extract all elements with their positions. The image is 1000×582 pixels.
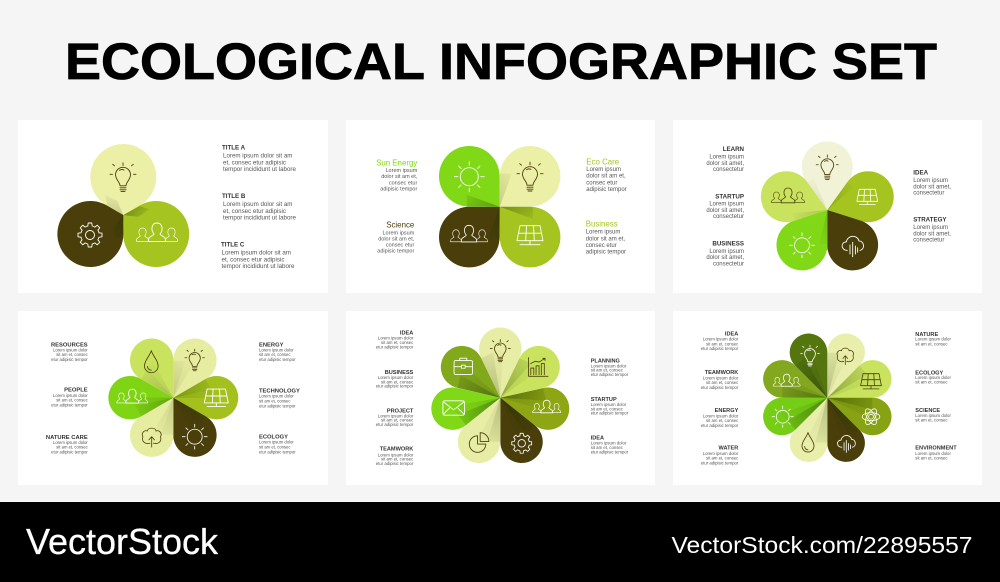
logo: VectorStock: VectorStock — [26, 521, 219, 562]
text: business: BUSINESS — [712, 241, 744, 248]
petal: drop — [784, 391, 845, 468]
icon: people — [450, 225, 488, 242]
text: idea: Lorem ipsum dolor — [591, 441, 627, 446]
text: environment: ENVIRONMENT — [915, 446, 957, 452]
text: title C: Lorem ipsum dolor sit am — [222, 250, 291, 257]
text: energy: ENERGY — [259, 342, 284, 348]
icon: people — [533, 400, 561, 413]
text: title B: TITLE B — [222, 193, 246, 200]
text: title A: tempor incididunt ut labore — [223, 166, 296, 173]
text: ecology: sit am et, consec — [915, 380, 948, 385]
text: strategy: dolor sit amet, — [913, 231, 951, 237]
panel: six petals — [18, 311, 328, 485]
icon: cloud — [837, 435, 855, 452]
petal: people — [108, 376, 173, 419]
text: title C: TITLE C — [221, 242, 245, 249]
text: business: etur adipisic tempor — [376, 384, 414, 389]
text: business: Lorem ipsum — [586, 230, 620, 236]
petal: people — [757, 354, 834, 415]
text: nature: Lorem ipsum dolor — [915, 337, 951, 342]
petal: drop — [122, 331, 192, 409]
text: ecology: ECOLOGY — [259, 434, 288, 440]
petal: bulb — [155, 331, 225, 409]
icon: solar panel — [857, 189, 878, 204]
petal: bulb — [479, 328, 522, 398]
text: idea: IDEA — [400, 330, 413, 336]
icon: cloud — [842, 236, 864, 257]
text: idea: dolor sit amet, — [913, 184, 951, 190]
text: sun energy: adipisic tempor — [380, 187, 417, 193]
petal: team — [107, 186, 201, 279]
text: idea: consectetur — [913, 191, 944, 197]
text: idea: Lorem ipsum dolor — [378, 336, 414, 341]
text: sun energy: dolor sit am et, — [381, 174, 418, 180]
icon: drop — [144, 351, 158, 373]
text: ecology: Lorem ipsum dolor — [915, 375, 951, 380]
text: teamwork: Lorem ipsum dolor — [703, 375, 739, 380]
text: sun energy: Sun Energy — [376, 159, 417, 168]
icon: bulb — [185, 349, 204, 371]
text: title A: TITLE A — [222, 145, 246, 152]
text: planning: PLANNING — [591, 358, 620, 364]
text: teamwork: Lorem ipsum dolor — [378, 452, 414, 457]
text: eco care: Lorem ipsum — [586, 167, 621, 173]
text: teamwork: sit am et, consec — [381, 457, 414, 462]
icon: solar panel — [204, 389, 228, 407]
icon: people — [773, 374, 800, 386]
text: energy: Lorem ipsum dolor — [259, 347, 294, 352]
text: science: sit am et, consec — [915, 418, 948, 423]
text: science: Science — [386, 221, 415, 230]
panel: eight petals — [673, 311, 982, 485]
icon: people — [117, 389, 148, 403]
icon: sun — [454, 162, 484, 192]
petal: gear — [481, 389, 550, 470]
text: startup: STARTUP — [591, 397, 617, 403]
text: idea: Lorem ipsum dolor — [703, 337, 739, 342]
text: teamwork: TEAMWORK — [705, 370, 738, 376]
petal: sun energy — [426, 133, 521, 228]
text: nature care: sit am et, consec — [56, 445, 88, 450]
petal: idea — [90, 144, 156, 215]
image id: VectorStock.com/22895557 — [672, 532, 972, 558]
text: learn: consectetur — [713, 167, 744, 173]
text: teamwork: sit am et, consec — [706, 380, 739, 385]
text: nature: NATURE — [915, 332, 938, 338]
petal: business — [478, 185, 573, 280]
text: startup: etur adipisic tempor — [591, 411, 629, 416]
petal: sun — [155, 387, 225, 465]
icon: people — [771, 188, 805, 203]
text: resources: sit am et, consec — [56, 352, 88, 357]
text: project: etur adipisic tempor — [376, 422, 414, 427]
text: idea: IDEA — [591, 435, 604, 441]
text: eco care: adipisic tempor — [586, 187, 627, 193]
icon: bulb — [816, 155, 838, 179]
text: science: SCIENCE — [915, 408, 940, 414]
text: learn: dolor sit amet, — [706, 161, 744, 167]
text: strategy: STRATEGY — [913, 217, 947, 224]
text: business: adipisic tempor — [586, 250, 626, 256]
petal: people — [496, 377, 573, 434]
text: title C: et, consec etur adipisic — [222, 256, 284, 263]
icon: sun — [790, 233, 814, 258]
text: business: dolor sit am et, — [586, 236, 625, 242]
icon: bulb — [801, 345, 819, 366]
text: technology: sit am et, consec — [259, 399, 290, 404]
text: idea: IDEA — [725, 332, 738, 338]
text: startup: Lorem ipsum dolor — [591, 402, 627, 407]
text: nature care: NATURE CARE — [46, 435, 88, 441]
text: science: dolor sit am et, — [378, 236, 415, 242]
text: title A: et, consec etur adipisic — [223, 159, 286, 166]
text: business: dolor sit amet, — [706, 255, 744, 261]
icon: bulb — [490, 340, 510, 362]
panel: three petals — [18, 120, 328, 293]
text: planning: Lorem ipsum dolor — [591, 363, 627, 368]
text: eco care: Eco Care — [586, 157, 620, 166]
icon: gear — [78, 223, 102, 247]
text: title B: et, consec etur adipisic — [223, 208, 286, 215]
icon: mail — [443, 401, 464, 415]
icon: chart — [529, 358, 548, 376]
petal: pale idea — [802, 141, 853, 210]
text: idea: sit am et, consec — [706, 341, 739, 346]
petal: pie — [451, 389, 519, 470]
text: title C: tempor incididunt ut labore — [222, 263, 295, 270]
petal: settings — [45, 186, 140, 279]
text: strategy: Lorem ipsum — [913, 225, 948, 231]
text: startup: Lorem ipsum — [709, 202, 744, 208]
text: title A: Lorem ipsum dolor sit am — [223, 152, 292, 160]
text: title B: tempor incididunt ut labore — [223, 215, 296, 222]
text: people: etur adipisic tempor — [51, 402, 88, 407]
petal: solar — [173, 376, 238, 419]
text: idea: etur adipisic tempor — [376, 344, 414, 349]
petal: mail — [427, 377, 505, 434]
text: nature care: etur adipisic tempor — [51, 450, 88, 455]
text: science: Lorem ipsum dolor — [915, 413, 951, 418]
text: business: sit am et, consec — [381, 379, 414, 384]
text: learn: Lorem ipsum — [709, 155, 744, 161]
icon: atom — [862, 407, 880, 426]
text: water: WATER — [719, 446, 738, 452]
text: energy: sit am et, consec — [259, 352, 290, 357]
petal: solar — [820, 354, 897, 415]
petal: solar — [819, 165, 900, 234]
petal: briefcase — [432, 337, 514, 414]
text: business: BUSINESS — [385, 370, 414, 376]
text: water: etur adipisic tempor — [701, 461, 739, 466]
text: people: PEOPLE — [64, 388, 88, 394]
text: learn: LEARN — [723, 146, 745, 153]
text: ecology: Lorem ipsum dolor — [259, 440, 294, 445]
text: business: Business — [586, 220, 618, 229]
petal: cloud — [807, 195, 888, 280]
text: energy: etur adipisic tempor — [701, 423, 739, 428]
text: ecology: ECOLOGY — [915, 370, 944, 376]
text: idea: IDEA — [913, 170, 929, 177]
icon: people — [136, 223, 178, 242]
text: environment: Lorem ipsum dolor — [915, 451, 951, 456]
text: water: sit am et, consec — [706, 456, 739, 461]
text: business: consec etur — [586, 243, 617, 249]
panel: four petals — [346, 120, 655, 293]
text: startup: sit am et, consec — [591, 406, 624, 411]
petal: chart — [487, 337, 568, 414]
text: resources: Lorem ipsum dolor — [53, 347, 88, 352]
icon: tree — [837, 348, 854, 365]
text: business: consectetur — [713, 261, 744, 267]
text: planning: sit am et, consec — [591, 368, 624, 373]
icon: solar panel — [861, 374, 881, 389]
text: ecology: etur adipisic tempor — [259, 449, 296, 454]
text: project: sit am et, consec — [381, 418, 414, 423]
icon: bulb — [517, 162, 543, 191]
text: nature care: Lorem ipsum dolor — [53, 440, 88, 445]
icon: solar panel — [517, 226, 543, 245]
text: title B: Lorem ipsum dolor sit am — [223, 201, 292, 208]
text: project: PROJECT — [387, 408, 414, 414]
text: energy: ENERGY — [715, 408, 739, 414]
text: ecology: sit am et, consec — [259, 444, 290, 449]
petal: sun — [757, 380, 834, 441]
text: teamwork: TEAMWORK — [380, 447, 413, 453]
petal: bulb — [784, 328, 845, 405]
text: idea: Lorem ipsum — [913, 178, 948, 184]
text: startup: consectetur — [713, 214, 744, 220]
text: technology: etur adipisic tempor — [259, 403, 296, 408]
text: environment: sit am et, consec — [915, 456, 948, 461]
text: resources: RESOURCES — [51, 342, 88, 348]
text: people: sit am et, consec — [56, 398, 88, 403]
text: energy: etur adipisic tempor — [259, 357, 296, 362]
text: energy: Lorem ipsum dolor — [703, 414, 739, 419]
text: water: Lorem ipsum dolor — [703, 451, 739, 456]
text: project: Lorem ipsum dolor — [378, 413, 414, 418]
text: eco care: dolor sit am et, — [586, 174, 626, 180]
petal: sun — [766, 195, 848, 280]
text: resources: etur adipisic tempor — [51, 357, 88, 362]
text: teamwork: etur adipisic tempor — [701, 385, 739, 390]
text: nature: sit am et, consec — [915, 341, 948, 346]
text: energy: sit am et, consec — [706, 418, 739, 423]
text: sun energy: Lorem ipsum — [386, 168, 418, 174]
petal: atom — [820, 380, 897, 441]
title: ECOLOGICAL INFOGRAPHIC SET — [65, 33, 937, 90]
icon: bulb — [110, 163, 136, 192]
icon: drop — [802, 433, 814, 452]
text: strategy: consectetur — [913, 238, 944, 244]
text: idea: sit am et, consec — [381, 340, 414, 345]
text: sun energy: consec etur — [389, 180, 417, 186]
panel: five petals — [673, 120, 982, 293]
text: eco care: consec etur — [586, 180, 617, 186]
icon: pie — [469, 433, 489, 452]
petal: science — [426, 185, 521, 280]
petal: cloud — [810, 391, 871, 468]
text: people: Lorem ipsum dolor — [53, 393, 88, 398]
text: idea: sit am et, consec — [591, 445, 624, 450]
petal: eco care — [478, 133, 573, 228]
petal: tree — [810, 328, 871, 405]
text: idea: etur adipisic tempor — [591, 449, 629, 454]
petal: tree — [122, 387, 192, 465]
icon: sun — [772, 406, 793, 427]
text: planning: etur adipisic tempor — [591, 372, 629, 377]
petal: people — [754, 165, 835, 234]
text: business: Lorem ipsum dolor — [378, 375, 414, 380]
text: science: Lorem ipsum — [383, 230, 415, 236]
text: teamwork: etur adipisic tempor — [376, 461, 414, 466]
icon: tree — [142, 428, 161, 447]
panel: seven petals — [346, 311, 655, 485]
text: science: adipisic tempor — [377, 248, 414, 254]
text: business: Lorem ipsum — [709, 249, 744, 255]
icon: briefcase — [454, 358, 473, 374]
icon: sun — [182, 424, 207, 449]
icon: gear — [512, 433, 532, 453]
text: science: consec etur — [386, 242, 414, 248]
text: idea: etur adipisic tempor — [701, 346, 739, 351]
text: startup: dolor sit amet, — [706, 208, 744, 214]
text: technology: TECHNOLOGY — [259, 389, 300, 395]
text: startup: STARTUP — [715, 193, 744, 200]
text: technology: Lorem ipsum dolor — [259, 394, 294, 399]
footer band — [0, 502, 1000, 582]
